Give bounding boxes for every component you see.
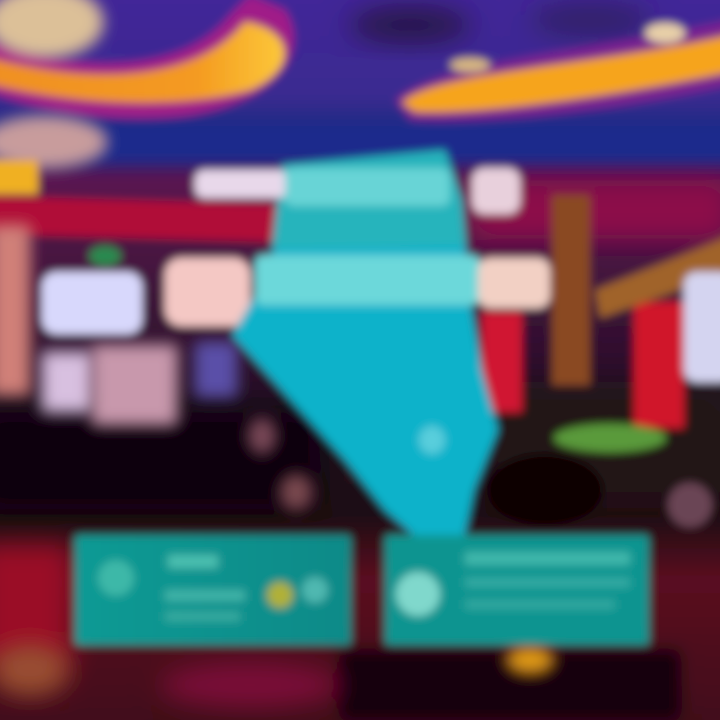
ceiling decor top left xyxy=(0,0,103,58)
slot machine screens xyxy=(42,246,312,510)
upper left balcony xyxy=(0,116,295,395)
icon: right panel badge xyxy=(396,572,440,616)
map location marker xyxy=(419,426,445,454)
right panel text xyxy=(465,552,630,609)
right side machines xyxy=(482,195,720,527)
state map shape xyxy=(232,150,498,548)
icon: left panel emblem xyxy=(267,577,328,608)
left panel text xyxy=(165,555,245,621)
panel: right info xyxy=(385,535,649,645)
panel: left info xyxy=(75,535,351,645)
headline line one xyxy=(195,168,520,214)
ceiling ring: right xyxy=(395,20,720,121)
headline line two xyxy=(255,255,550,308)
icon: left panel badge xyxy=(98,560,134,596)
ceiling ring: left xyxy=(0,0,293,118)
